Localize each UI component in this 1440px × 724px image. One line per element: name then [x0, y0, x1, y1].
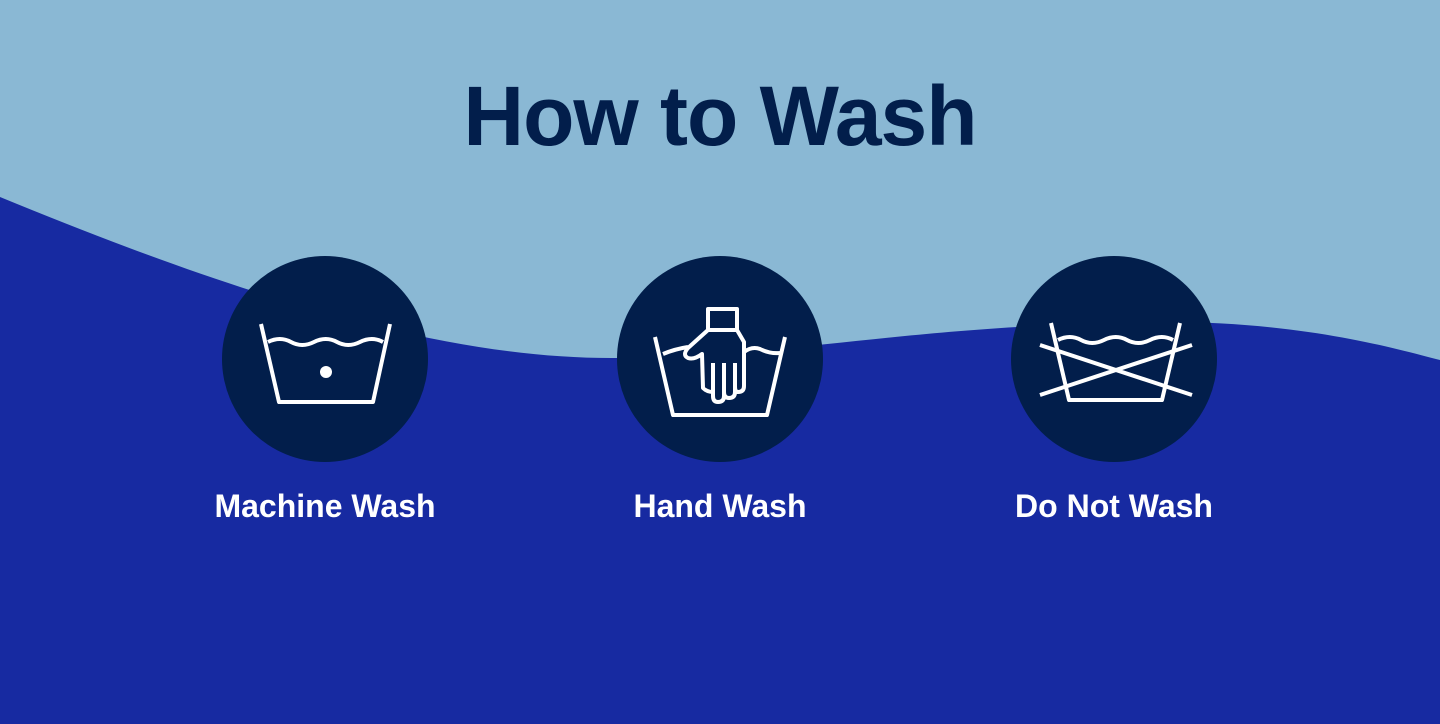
icon: machine wash	[222, 256, 428, 462]
title: How to Wash	[463, 69, 977, 163]
label: hand wash: Hand Wash	[633, 488, 807, 524]
label: machine wash: Machine Wash	[214, 488, 436, 524]
label: do not wash: Do Not Wash	[1015, 488, 1213, 524]
icon: hand wash	[617, 256, 823, 462]
icon: do not wash	[1011, 256, 1217, 462]
